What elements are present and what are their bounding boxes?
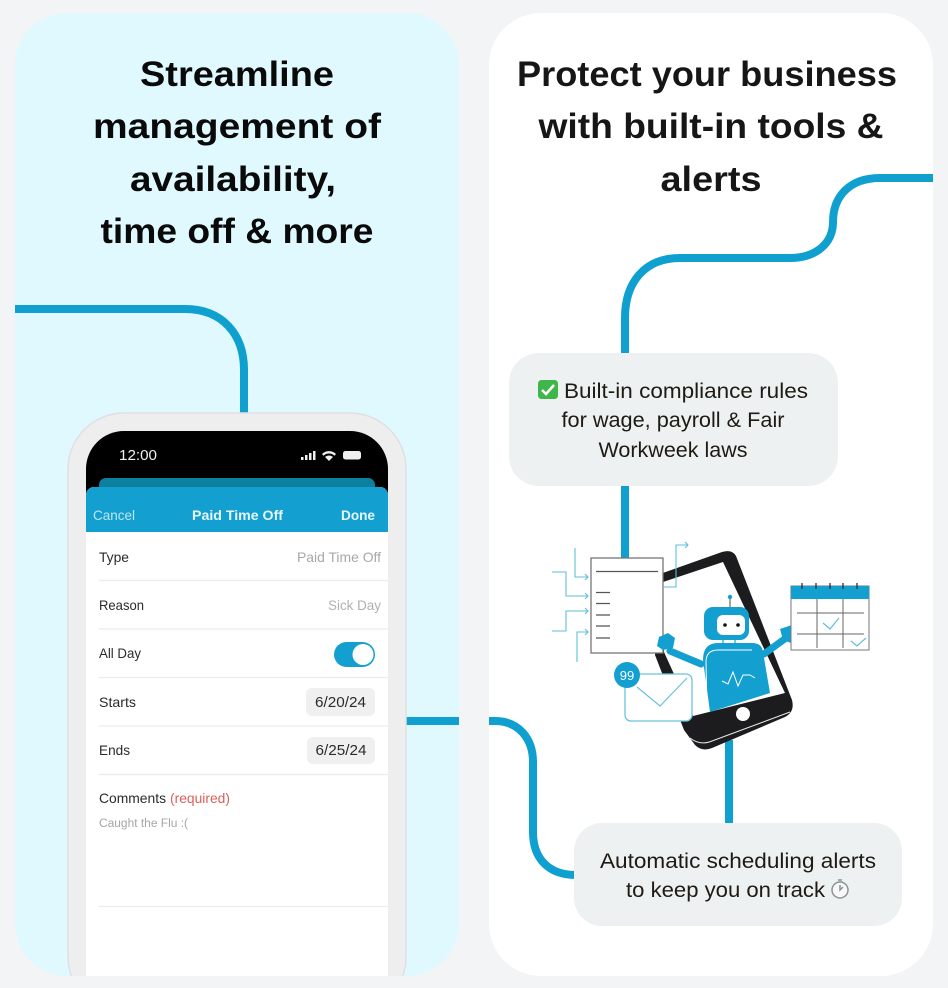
- robot torso: [703, 643, 770, 712]
- end date: 6/25/24: [316, 743, 366, 759]
- robot hands: [657, 633, 675, 650]
- connector: robot to alerts card: [725, 740, 733, 825]
- header labels: [94, 510, 374, 520]
- heading: streamline management: management of: [93, 107, 381, 146]
- form rows: Sick Day: [328, 597, 381, 613]
- status bar time: 12:00: [119, 448, 157, 464]
- illustration: robot with phone: [552, 542, 869, 749]
- callout: scheduling alerts: [574, 823, 902, 926]
- connector: heading to phone: [15, 309, 244, 414]
- card behind sheet: [99, 478, 375, 487]
- heading: streamline management: Streamline: [140, 55, 334, 94]
- stopwatch emoji: [832, 880, 848, 898]
- tablet body: [655, 551, 793, 749]
- phone mockup: [68, 413, 406, 988]
- notification badge: [614, 662, 640, 688]
- heading: streamline management: availability,: [130, 160, 336, 199]
- notification badge: 99: [620, 668, 634, 683]
- form rows: Caught the Flu :(: [99, 818, 188, 830]
- phone screen: [86, 431, 388, 494]
- callout: scheduling alerts: Automatic scheduling alerts: [600, 850, 876, 873]
- document: [591, 558, 663, 653]
- panel: compliance tools and alerts: [489, 13, 933, 976]
- form rows: Type: [99, 549, 129, 565]
- callout: compliance rules: Workweek laws: [598, 439, 748, 462]
- robot head: [704, 607, 749, 640]
- start date: 6/20/24: [315, 695, 366, 711]
- form rows: All Day: [99, 645, 141, 661]
- form rows: Reason: [99, 597, 144, 613]
- form rows: Paid Time Off: [297, 549, 381, 565]
- connector: left edge to alerts card: [489, 721, 576, 875]
- row dividers: [99, 580, 388, 906]
- status bar icons: [301, 451, 361, 461]
- header labels: Paid Time Off: [192, 507, 283, 523]
- tablet home button: [736, 707, 750, 721]
- antenna: [729, 598, 731, 607]
- tablet screen: [660, 562, 785, 716]
- end date: [307, 737, 375, 764]
- header labels: Done: [341, 507, 375, 523]
- header labels: Cancel: [93, 507, 135, 523]
- heartbeat: [722, 672, 755, 686]
- robot neck: [722, 640, 736, 643]
- toggle: [334, 642, 375, 667]
- form rows: Comments: [99, 790, 166, 806]
- heading: protect your business: Protect your business: [517, 55, 897, 94]
- form rows: Ends: [99, 742, 130, 758]
- form rows: (required): [170, 790, 230, 806]
- start date: [306, 688, 375, 716]
- heading: streamline management: time off & more: [100, 212, 374, 251]
- callout: scheduling alerts: to keep you on track: [626, 879, 826, 902]
- form rows: Starts: [99, 694, 136, 710]
- phone frame: [68, 413, 406, 988]
- heading: streamline management: [93, 55, 381, 251]
- envelope: [625, 674, 692, 721]
- robot arms: [670, 638, 786, 664]
- heading: protect your business: alerts: [660, 160, 762, 199]
- tablet bottom highlight: [690, 712, 790, 743]
- check mark emoji: [538, 380, 558, 399]
- panel: availability and time off: [15, 13, 459, 988]
- callout: compliance rules: Built-in compliance rules: [564, 380, 808, 403]
- form sheet: [86, 487, 388, 988]
- form rows: [99, 549, 381, 830]
- data flow arrows: [552, 542, 688, 662]
- heading: protect your business: with built-in tools &: [537, 107, 884, 146]
- sheet header: [86, 487, 388, 532]
- connector: phone to right panel: [404, 717, 459, 725]
- heading: protect your business: [517, 55, 897, 199]
- callout: compliance rules: [509, 353, 838, 486]
- callout: compliance rules: for wage, payroll & Fair: [562, 409, 785, 432]
- calendar: [791, 583, 869, 650]
- connector: top right to compliance card: [625, 178, 933, 560]
